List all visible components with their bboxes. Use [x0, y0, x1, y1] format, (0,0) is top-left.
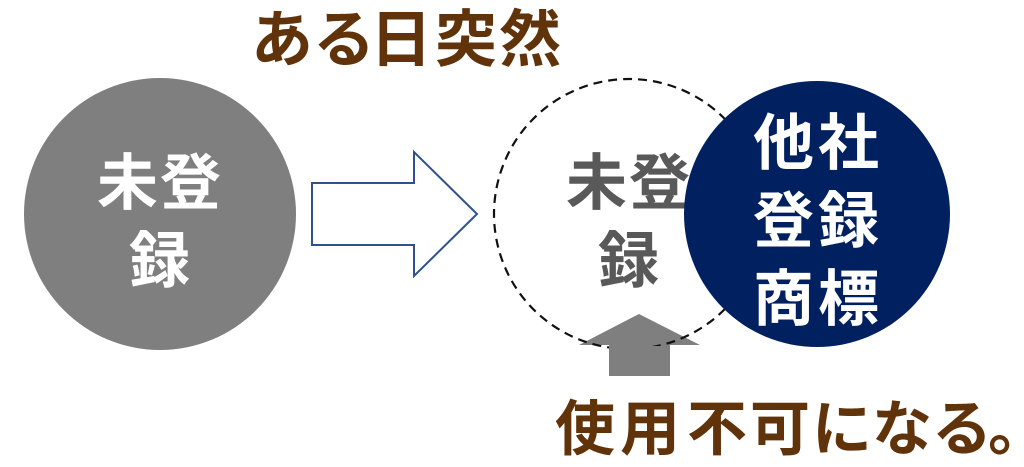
arrow: up	[579, 314, 700, 376]
heading: one day suddenly: ある日突然	[251, 6, 561, 75]
grey circle: unregistered: 未登	[97, 149, 221, 217]
grey circle: unregistered: 録	[129, 227, 190, 295]
grey circle: unregistered	[24, 78, 296, 350]
dashed circle: unregistered mark	[494, 79, 764, 349]
navy circle: registered by another company	[684, 81, 950, 347]
dashed circle: unregistered mark: 録	[598, 227, 659, 295]
navy circle: registered by another company: 他社	[753, 109, 879, 177]
navy circle: registered by another company: 商標	[753, 265, 879, 333]
dashed circle: unregistered mark: 未登	[566, 149, 690, 217]
navy circle: registered by another company: 登録	[753, 187, 879, 255]
arrow: transition right	[312, 152, 477, 276]
